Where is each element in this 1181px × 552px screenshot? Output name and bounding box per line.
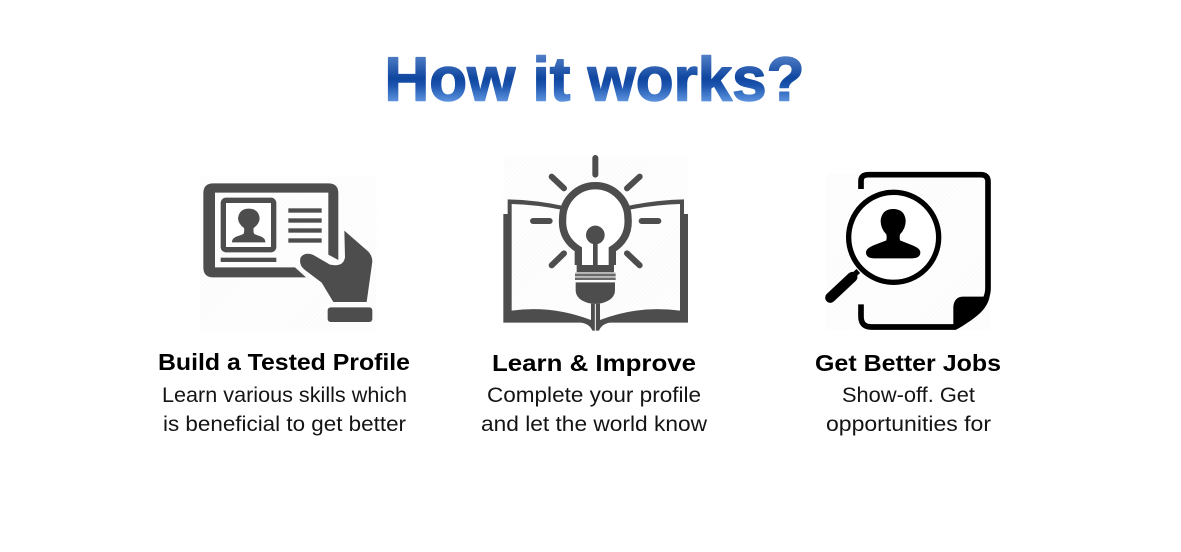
heading: Learn & Improve	[492, 350, 696, 376]
text block: opportunities for	[826, 413, 991, 436]
text block: Learn various skills which	[162, 384, 407, 407]
icon: hand holding profile tablet	[200, 177, 377, 332]
icon: light bulb over open book	[503, 157, 688, 331]
text block	[826, 384, 991, 436]
text block: Show-off. Get	[842, 384, 975, 407]
panel: build a tested profile	[158, 177, 410, 436]
text block: Complete your profile	[487, 384, 701, 407]
panel: get better jobs	[815, 173, 1001, 436]
text block: and let the world know	[481, 413, 708, 436]
text block	[481, 384, 708, 436]
text block	[162, 384, 407, 436]
text block: is beneficial to get better	[163, 413, 406, 436]
heading: Build a Tested Profile	[158, 349, 410, 375]
title: How it works?	[384, 44, 804, 114]
icon: magnifier over profile document	[827, 173, 990, 330]
panel: learn and improve	[481, 157, 708, 436]
heading: Get Better Jobs	[815, 350, 1001, 376]
